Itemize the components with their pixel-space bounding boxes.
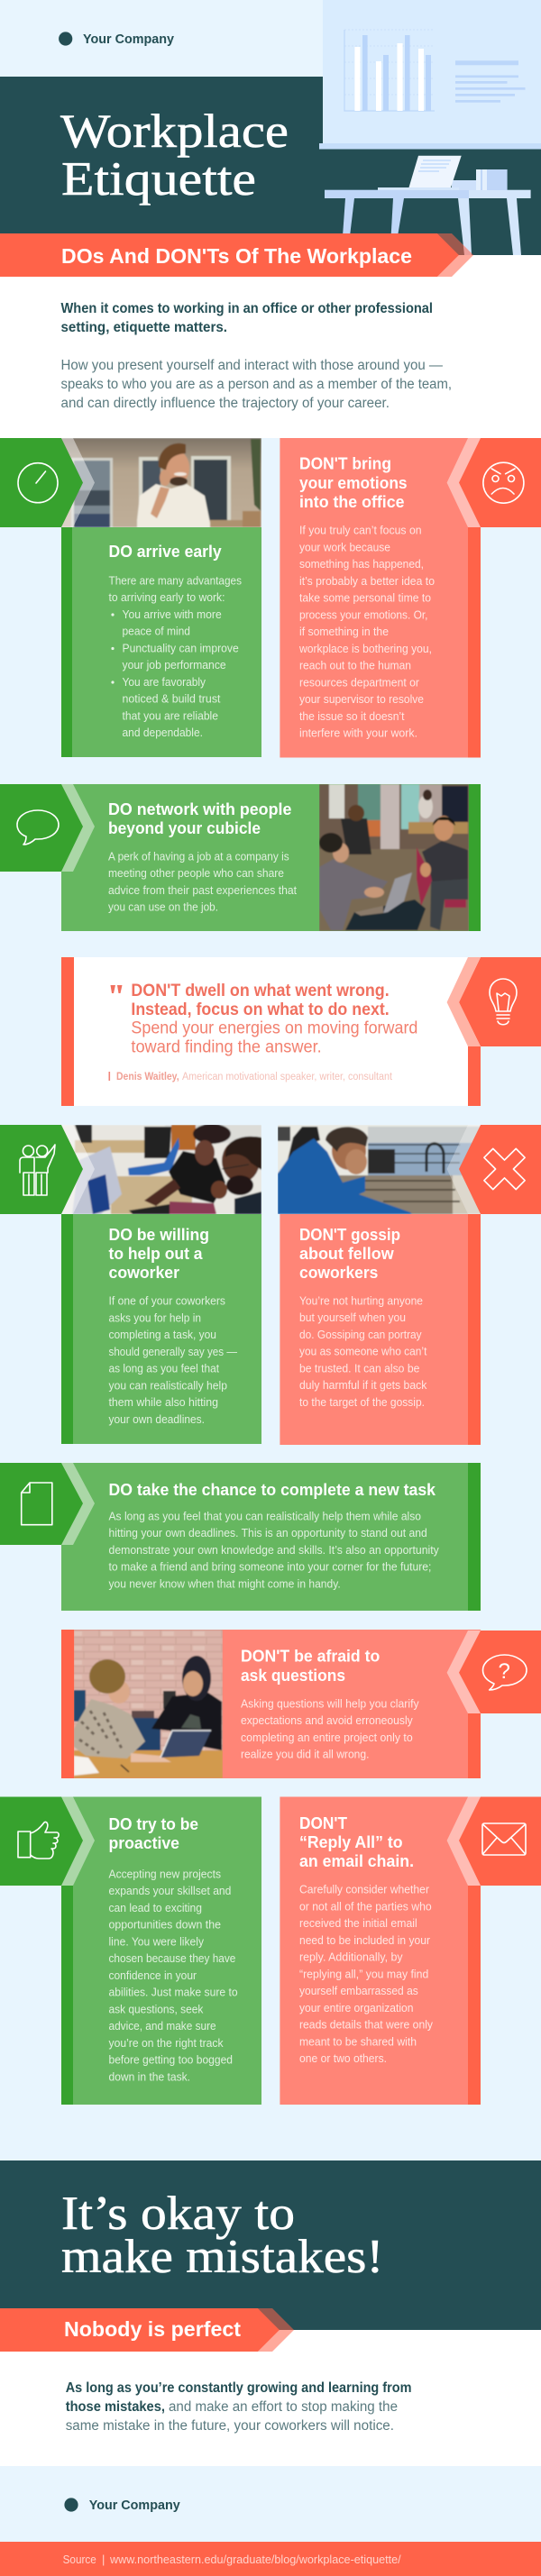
icon: two people — [0, 1125, 95, 1214]
panel: DON'T Reply All — [280, 1797, 541, 2105]
body text: you as someone who can’t — [299, 1345, 427, 1357]
icon: thumbs up — [0, 1797, 95, 1886]
icon: light bulb — [447, 957, 541, 1046]
photo: two women talking — [74, 1630, 223, 1778]
body text: There are many advantages — [108, 573, 242, 587]
heading: DON'T be afraid to — [241, 1647, 380, 1666]
icon: document — [0, 1463, 95, 1545]
body text: your job performance — [123, 658, 226, 671]
body text: As long as you feel that you can realistically help them while also — [108, 1509, 421, 1522]
body text: Asking questions will help you clarify — [241, 1696, 419, 1710]
banner: subtitle: DOs And DON'Ts Of The Workplace — [61, 244, 412, 268]
body text: A perk of having a job at a company is — [108, 849, 289, 863]
body text: something has happened, — [299, 557, 424, 571]
body text: you can use on the job. — [108, 900, 218, 914]
heading: into the office — [299, 492, 404, 511]
body text: Accepting new projects — [108, 1867, 221, 1880]
icon: question bubble: ? — [498, 1659, 510, 1684]
body text: take some personal time to — [299, 591, 431, 605]
closing text: those mistakes, — [66, 2399, 165, 2415]
icon: speech bubble — [0, 784, 95, 872]
body text: received the initial email — [299, 1916, 417, 1930]
attribution: American motivational speaker, writer, consultant — [182, 1072, 393, 1082]
panel: DO network — [0, 784, 481, 931]
body text: meant to be shared with — [299, 2035, 417, 2048]
body text: chosen because they have — [108, 1951, 235, 1965]
body text — [298, 524, 435, 740]
heading: your emotions — [299, 473, 408, 492]
panel: DON'T be afraid — [61, 1630, 541, 1778]
closing heading: It’s okay to — [61, 2188, 295, 2240]
heading — [108, 1225, 209, 1282]
body text: do. Gossiping can portray — [299, 1328, 422, 1341]
banner: subtitle — [0, 233, 473, 277]
body text: You arrive with more — [123, 607, 222, 621]
body text: your work because — [299, 541, 390, 553]
body text: completing a task, you — [108, 1328, 216, 1341]
photo: upset man in blue jacket — [278, 1125, 481, 1214]
closing text: and make an effort to stop making the — [169, 2399, 398, 2415]
body text — [108, 1867, 238, 2083]
quote mark — [110, 985, 123, 993]
heading: proactive — [108, 1833, 179, 1852]
body text: them while also hitting — [108, 1395, 218, 1409]
photo: coworkers at a computer — [61, 1124, 261, 1214]
body text: Punctuality can improve — [123, 641, 239, 654]
heading: DON'T — [299, 1813, 348, 1832]
body text: asks you for help in — [108, 1311, 201, 1324]
body text — [108, 1294, 237, 1426]
panel: DO take the chance — [0, 1463, 481, 1611]
heading: about fellow — [299, 1244, 394, 1263]
quote text — [131, 982, 417, 1057]
quote text: Spend your energies on moving forward — [131, 1019, 417, 1038]
body text: noticed & build trust — [123, 692, 221, 706]
intro text: setting, etiquette matters. — [61, 320, 227, 335]
intro text: When it comes to working in an office or other professional — [61, 301, 433, 316]
heading — [299, 1813, 414, 1870]
body text: expectations and avoid erroneously — [241, 1713, 413, 1727]
body text: interfere with your work. — [299, 726, 417, 740]
heading — [108, 799, 291, 837]
body text: process your emotions. Or, — [299, 607, 427, 622]
intro text: How you present yourself and interact with those around you — — [61, 358, 443, 373]
heading: coworkers — [299, 1263, 378, 1282]
footer source bar: Source — [63, 2553, 96, 2566]
panel: DON'T bring your emotions — [280, 438, 541, 757]
heading: DO try to be — [108, 1814, 198, 1833]
body text: ask questions, seek — [108, 2002, 204, 2015]
banner: nobody is perfect: Nobody is perfect — [64, 2317, 241, 2341]
attribution: Denis Waitley, — [116, 1072, 179, 1082]
body text: duly harmful if it gets back — [299, 1378, 427, 1392]
body text: advice, and make sure — [108, 2019, 216, 2032]
intro text: speaks to who you are as a person and as a member of the team, — [61, 377, 452, 392]
banner: nobody is perfect — [0, 2308, 294, 2352]
body text: you’re on the right track — [108, 2036, 224, 2050]
heading: DO be willing — [108, 1225, 209, 1244]
heading: “Reply All” to — [299, 1832, 403, 1851]
icon: question bubble — [447, 1631, 541, 1713]
body text: that you are reliable — [123, 708, 218, 722]
heading: DO arrive early — [108, 542, 222, 561]
footer source bar: | — [102, 2553, 105, 2566]
header: dark band — [0, 77, 541, 255]
heading: ask questions — [241, 1666, 345, 1685]
photo: man on phone — [61, 438, 261, 527]
body text: to the target of the gossip. — [299, 1395, 425, 1409]
heading: to help out a — [108, 1244, 203, 1263]
body text: confidence in your — [108, 1969, 197, 1982]
intro text — [61, 301, 452, 411]
body text: “replying all,” you may find — [299, 1967, 428, 1981]
body text: reply. Additionally, by — [299, 1950, 403, 1964]
heading — [241, 1647, 380, 1685]
body text: You’re not hurting anyone — [299, 1293, 423, 1307]
icon: X mark — [447, 1125, 541, 1214]
body text: as long as you feel that — [108, 1362, 219, 1375]
icon: angry face — [447, 438, 541, 527]
body text: completing an entire project only to — [241, 1731, 413, 1744]
icon: clock — [0, 438, 95, 527]
body text: be trusted. It can also be — [299, 1361, 419, 1375]
body text: reads details that were only — [299, 2018, 433, 2032]
panel: DO arrive early — [0, 438, 261, 757]
title: Etiquette — [61, 153, 256, 206]
body text: meeting other people who can share — [108, 866, 284, 880]
body text — [299, 1883, 433, 2065]
body text: it’s probably a better idea to — [299, 574, 435, 588]
panel: quote — [61, 957, 541, 1106]
closing heading: make mistakes! — [61, 2231, 384, 2283]
footer source bar: www.northeastern.edu/graduate/blog/workplace-etiquette/ — [109, 2553, 401, 2566]
closing text — [66, 2380, 411, 2434]
heading — [299, 1225, 400, 1282]
body text: down in the task. — [108, 2069, 190, 2083]
heading: DO take the chance to complete a new task — [108, 1480, 436, 1499]
body text: If one of your coworkers — [108, 1294, 225, 1308]
body text: resources department or — [299, 676, 420, 689]
body text: reach out to the human — [299, 659, 411, 672]
quote text: DON'T dwell on what went wrong. — [131, 982, 390, 1000]
title: Workplace — [60, 105, 289, 158]
photo: two men talking — [319, 784, 469, 931]
body text: need to be included in your — [299, 1933, 431, 1947]
body text: your entire organization — [299, 2001, 413, 2014]
body text: workplace is bothering you, — [298, 642, 432, 655]
panel: DO try to be proactive — [0, 1797, 261, 2105]
header illustration: office whiteboard and desk — [319, 0, 541, 255]
body text: realize you did it all wrong. — [241, 1748, 370, 1761]
body text: you can realistically help — [108, 1379, 227, 1392]
heading: an email chain. — [299, 1851, 414, 1870]
panel: DO be willing — [0, 1124, 261, 1444]
body text: line. You were likely — [108, 1934, 204, 1948]
heading: coworker — [108, 1263, 179, 1282]
body text: abilities. Just make sure to — [108, 1986, 238, 1999]
body text — [108, 849, 297, 914]
body text: before getting too bogged — [108, 2053, 233, 2067]
quote text: toward finding the answer. — [131, 1038, 322, 1057]
body text: your supervisor to resolve — [299, 692, 424, 706]
body text: You are favorably — [123, 675, 206, 689]
heading: DON'T gossip — [299, 1225, 400, 1244]
quote text: Instead, focus on what to do next. — [131, 1000, 390, 1019]
body text: the issue so it doesn’t — [299, 709, 405, 723]
body text: expands your skillset and — [108, 1884, 231, 1897]
title — [60, 105, 289, 206]
panel: DON'T gossip — [278, 1125, 541, 1445]
footer source bar — [0, 2542, 541, 2576]
heading: beyond your cubicle — [108, 818, 261, 837]
heading: DON'T bring — [299, 454, 391, 473]
heading: DO network with people — [108, 799, 291, 818]
body text: demonstrate your own knowledge and skills. It’s also an opportunity — [108, 1543, 439, 1557]
body text: opportunities down the — [108, 1918, 221, 1932]
closing: dark band — [0, 2160, 541, 2330]
body text: to make a friend and bring someone into your corner for the future; — [108, 1560, 431, 1574]
closing heading — [61, 2188, 384, 2283]
body text: to arriving early to work: — [108, 590, 225, 604]
body text: or not all of the parties who — [299, 1900, 432, 1913]
body text: Carefully consider whether — [299, 1883, 430, 1896]
body text: hitting your own deadlines. This is an opportunity to stand out and — [108, 1526, 427, 1539]
intro text: and can directly influence the trajectory of your career. — [61, 396, 390, 411]
body text: yourself embarrassed as — [299, 1984, 418, 1997]
body text: If you truly can’t focus on — [299, 524, 422, 537]
body text: advice from their past experiences that — [108, 883, 297, 897]
icon: envelope — [447, 1797, 541, 1886]
body text: one or two others. — [299, 2051, 387, 2065]
body text: can lead to exciting — [108, 1901, 202, 1914]
body text: peace of mind — [123, 625, 190, 638]
body text: but yourself when you — [299, 1311, 406, 1324]
body text — [108, 573, 242, 739]
body text: if something in the — [299, 625, 389, 638]
heading — [299, 454, 408, 511]
body text: your own deadlines. — [108, 1412, 205, 1426]
footer logo: Your Company — [89, 2498, 180, 2513]
heading — [108, 1814, 198, 1852]
body text: you never know when that might come in handy. — [108, 1576, 341, 1590]
body text — [299, 1293, 427, 1409]
logo: your company: Your Company — [83, 32, 174, 47]
closing text: As long as you’re constantly growing and learning from — [66, 2380, 411, 2396]
body text: should generally say yes — — [108, 1345, 237, 1358]
body text — [108, 1509, 439, 1590]
body text: and dependable. — [123, 726, 203, 739]
closing text: same mistake in the future, your coworkers will notice. — [66, 2418, 394, 2434]
body text — [241, 1696, 419, 1761]
